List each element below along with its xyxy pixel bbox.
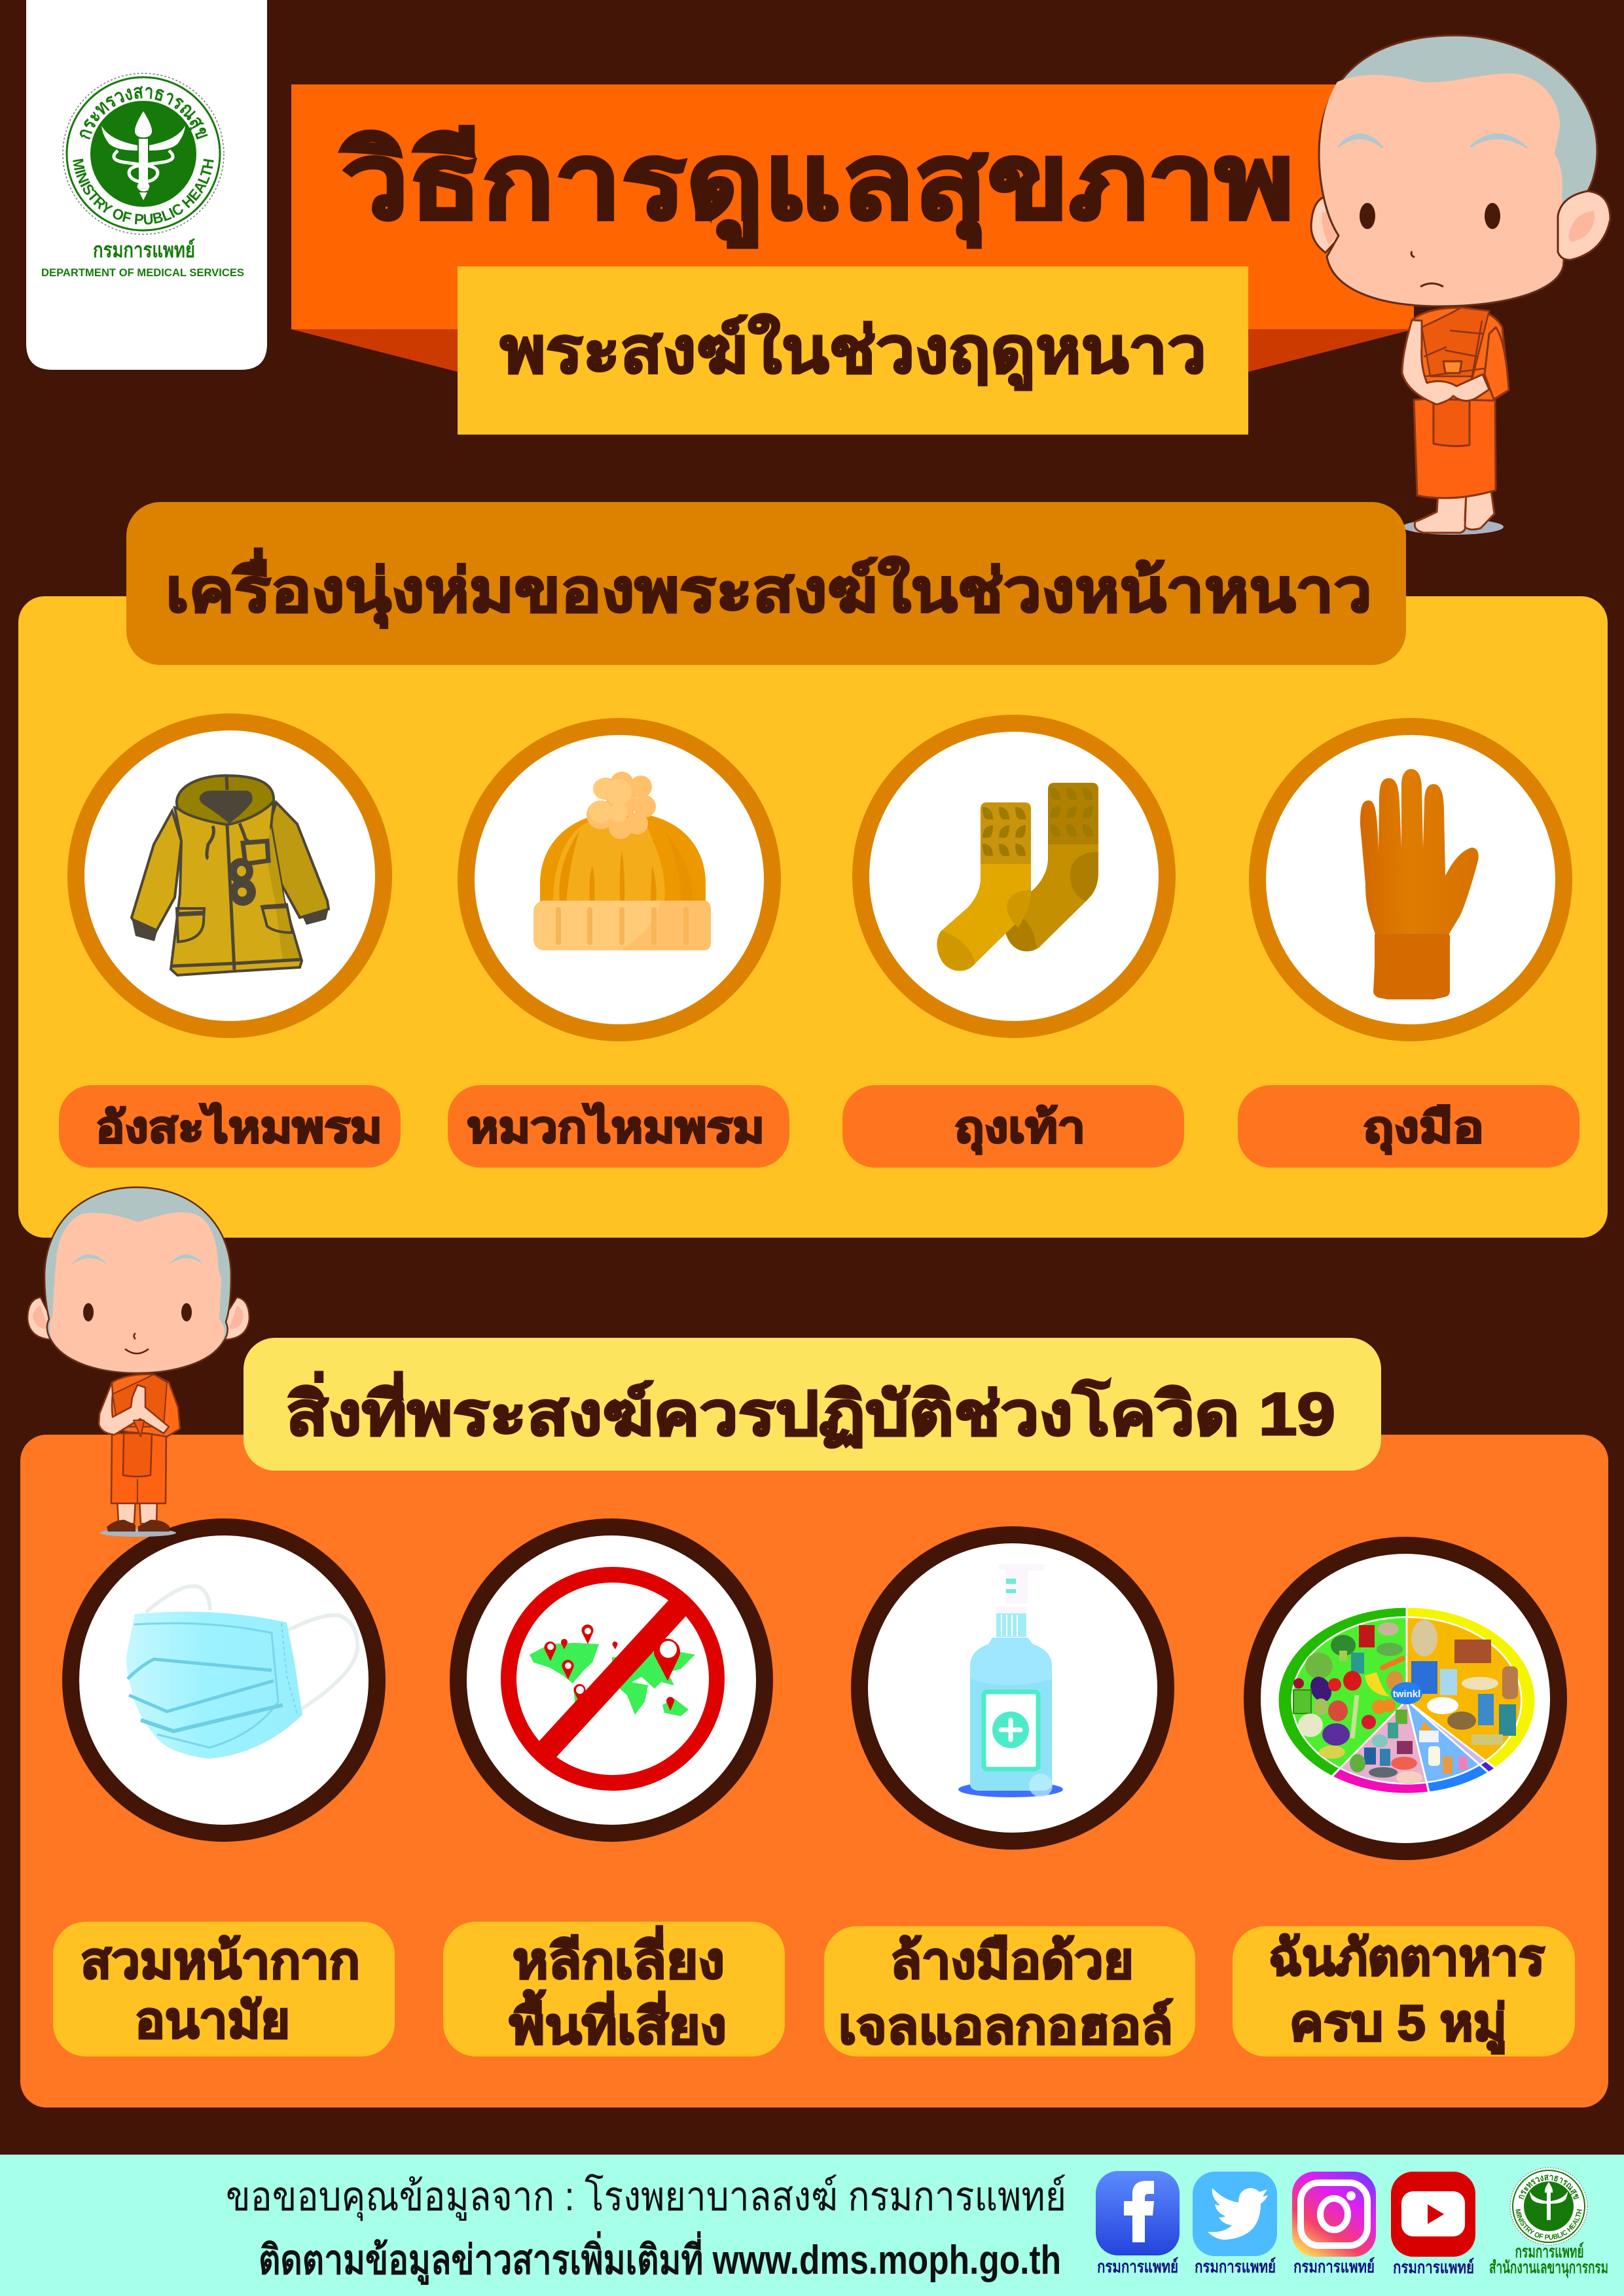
icon: socks — [861, 723, 1167, 1030]
subtitle box: พระสงฆ์ในช่วงฤดูหนาว — [500, 314, 1206, 391]
heading: covid practices: สิ่งที่พระสงฆ์ควรปฏิบัติช่วงโควิด 19 — [286, 1371, 1335, 1448]
logo card: กรมการแพทย์ — [93, 238, 195, 262]
icon: wool hat — [466, 726, 772, 1033]
logo card: DEPARTMENT OF MEDICAL SERVICES — [41, 266, 244, 279]
label: coat — [59, 1085, 401, 1168]
icon: youtube — [1391, 2172, 1475, 2277]
monk illustration top right — [1311, 35, 1610, 535]
label: gloves: ถุงมือ — [1363, 1103, 1484, 1155]
label: coat: อังสะไหมพรม — [96, 1102, 382, 1151]
icon: youtube: กรมการแพทย์ — [1393, 2257, 1474, 2277]
logo card — [26, 0, 267, 370]
logo card: MINISTRY OF PUBLIC HEALTH — [73, 158, 214, 224]
monk illustration left — [27, 1187, 249, 1537]
label: eat five food groups — [1233, 1926, 1575, 2056]
footer band — [0, 2155, 1624, 2296]
footer credit text: ติดตามข้อมูลข่าวสารเพิ่มเติมที่ www.dms.moph.go.th — [259, 2231, 1061, 2285]
icon: coat — [76, 722, 384, 1030]
heading: winter clothing: เครื่องนุ่งห่มของพระสงฆ์ในช่วงหน้าหนาว — [166, 548, 1372, 628]
footer credit text — [226, 2174, 1066, 2285]
label: wear a mask: อนามัย — [135, 1993, 290, 2049]
label: avoid risk areas — [443, 1922, 785, 2056]
label: wool hat — [448, 1085, 789, 1168]
label: gloves — [1238, 1085, 1579, 1168]
icon: twitter: กรมการแพทย์ — [1195, 2257, 1276, 2276]
icon: five food groups plate — [1252, 1545, 1559, 1852]
label: wear a mask — [53, 1922, 395, 2056]
icon: avoid risk areas — [458, 1527, 765, 1833]
label: eat five food groups: ครบ 5 หมู่ — [1290, 1996, 1507, 2054]
title banner — [291, 84, 1414, 372]
label: avoid risk areas: หลีกเลี่ยง — [513, 1926, 725, 1989]
label: socks — [842, 1085, 1184, 1168]
logo card: กระทรวงสาธารณสุข — [80, 86, 208, 140]
panel: covid practices — [20, 1435, 1608, 2108]
heading: winter clothing — [126, 502, 1406, 665]
footer credit text: ขอขอบคุณข้อมูลจาก : โรงพยาบาลสงฆ์ กรมการแพทย์ — [226, 2174, 1066, 2221]
icon: facebook: กรมการแพทย์ — [1097, 2257, 1178, 2276]
label: wool hat: หมวกไหมพรม — [467, 1102, 765, 1151]
label: wash hands with alcohol gel — [824, 1926, 1195, 2056]
icon: instagram — [1292, 2172, 1376, 2276]
label: wash hands with alcohol gel: ล้างมือด้วย — [890, 1933, 1134, 1989]
footer logo: MINISTRY OF PUBLIC HEALTH — [1515, 2209, 1582, 2240]
panel: winter clothing — [18, 596, 1608, 1238]
footer logo — [1489, 2168, 1608, 2278]
icon: instagram: กรมการแพทย์ — [1293, 2257, 1375, 2276]
icon: face mask — [71, 1527, 377, 1833]
heading: covid practices — [244, 1338, 1381, 1471]
icon: five food groups plate: twinkl — [1393, 1689, 1420, 1700]
subtitle box — [458, 266, 1248, 435]
icon: glove — [1257, 726, 1564, 1033]
label: wear a mask: สวมหน้ากาก — [81, 1933, 360, 1989]
icon: facebook — [1096, 2171, 1180, 2276]
label: wash hands with alcohol gel: เจลแอลกอฮอล์ — [839, 1999, 1173, 2054]
title banner: วิธีการดูแลสุขภาพ — [340, 122, 1294, 248]
footer logo: กระทรวงสาธารณสุข — [1519, 2174, 1579, 2200]
footer logo: กรมการแพทย์ — [1515, 2242, 1584, 2261]
icon: alcohol gel bottle — [859, 1535, 1166, 1841]
icon: twitter — [1193, 2172, 1277, 2276]
label: socks: ถุงเท้า — [954, 1103, 1085, 1155]
label: avoid risk areas: พื้นที่เสี่ยง — [509, 1990, 727, 2054]
label: eat five food groups: ฉันภัตตาหาร — [1269, 1930, 1545, 1986]
